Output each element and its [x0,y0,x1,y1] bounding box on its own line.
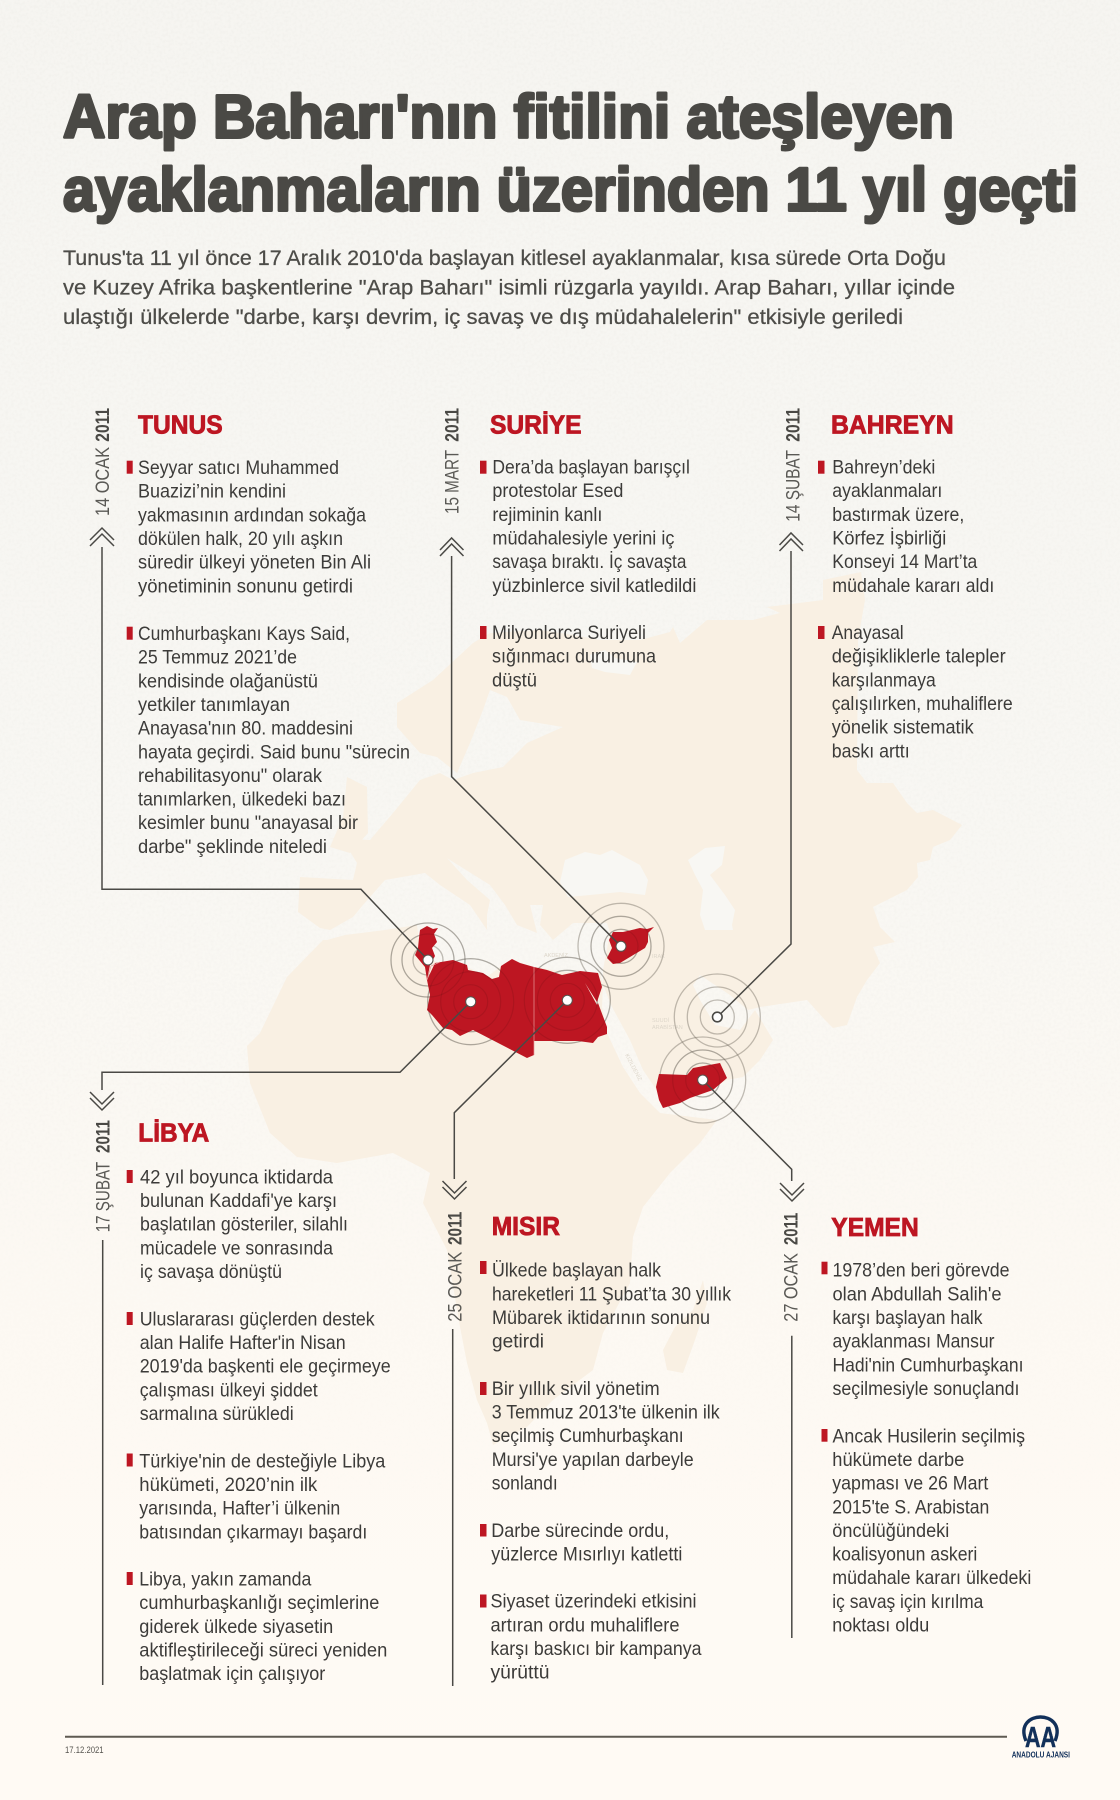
text block: Libya paragraph 4: cumhurbaşkanlığı seçimlerine [139,1592,379,1614]
intro text: ulaştığı ülkelerde "darbe, karşı devrim, iç savaş ve dış müdahalelerin" etkisiyle geriledi [63,306,903,329]
text block: Bahreyn paragraph 1: bastırmak üzere, [832,504,964,526]
text block: Yemen paragraph 2: 2015'te S. Arabistan [832,1496,989,1518]
title: ayaklanmaların üzerinden 11 yıl geçti [63,156,1078,224]
text block: Suriye paragraph 1: protestolar Esed [492,480,623,502]
rings: Bahrain [674,974,760,1060]
date: 14 Ocak 2011: 14 OCAK [92,447,114,516]
text block: Yemen paragraph 2: koalisyonun askeri [832,1544,977,1566]
text block: Suriye paragraph 1: yüzbinlerce sivil katledildi [492,575,696,597]
text block: Mısır paragraph 1: Mübarek iktidarının sonunu [492,1307,710,1329]
text block: Mısır paragraph 4: yürüttü [490,1662,550,1684]
land: Madagascar [663,1280,707,1373]
intro text: Tunus'ta 11 yıl önce 17 Aralık 2010'da başlayan kitlesel ayaklanmalar, kısa sürede Orta Doğu [63,247,946,270]
text block: Tunus paragraph 1: yönetiminin sonunu getirdi [138,575,353,597]
logo: Anadolu Ajansı [1012,1717,1070,1760]
map label: Suudi Arabistan: ARABİSTAN [652,1024,683,1031]
text block: Tunus paragraph 1: süredir ülkeyi yöneten Bin Ali [138,552,371,574]
text block: Mısır paragraph 4: artıran ordu muhaliflere [490,1614,680,1636]
date: 15 Mart 2011: 15 MART [441,450,463,514]
text block: Mısır paragraph 3: yüzlerce Mısırlıyı katletti [491,1544,682,1566]
text block: Libya paragraph 1: iç savaşa dönüştü [140,1261,282,1283]
text block: Libya paragraph 2: sarmalına sürükledi [140,1403,294,1425]
text block: Tunus paragraph 1: Seyyar satıcı Muhammed [138,457,339,479]
land: Africa [247,925,717,1445]
panel: Yemen [781,1213,1031,1638]
text block: Mısır paragraph 4: Siyaset üzerindeki etkisini [490,1591,696,1613]
highlighted countries [415,926,727,1108]
date: 14 Ocak 2011: 2011 [92,408,114,442]
timeline bar: Mısır [452,1329,454,1686]
text block: Suriye paragraph 2 [480,622,656,691]
text block: Yemen paragraph 2: öncülüğündeki [832,1520,949,1542]
panel: Bahreyn [783,408,1013,762]
text block: Libya paragraph 1: başlatılan gösteriler, silahlı [140,1214,348,1236]
arrow: Libya timeline leader [90,997,476,1110]
text block: Libya paragraph 1: bulunan Kaddafi'ye karşı [140,1190,337,1212]
panel: Libya [92,1120,391,1685]
timeline bar: Libya [102,1240,104,1685]
text block: Bahreyn paragraph 1: Körfez İşbirliği [832,526,946,550]
text block: Libya paragraph 4: Libya, yakın zamanda [139,1568,311,1590]
text block: Libya paragraph 2: alan Halife Hafter'in Nisan [140,1332,346,1354]
map label: Akdeniz: AKDENİZ [544,952,568,959]
text block: Libya paragraph 4: aktifleştirileceği süreci yeniden [139,1640,387,1662]
rings: Egypt [524,957,610,1043]
rings: Syria [578,903,664,989]
country: Tunisia [415,926,438,980]
footer date: 17.12.2021 [65,1745,104,1755]
date: 25 Ocak 2011: 2011 [445,1212,467,1245]
text block: Bahreyn paragraph 1: müdahale kararı aldı [832,575,994,597]
text block: Yemen paragraph 2: noktası oldu [832,1614,929,1636]
text block: Bahreyn paragraph 2: Anayasal [832,622,904,644]
text block: Tunus paragraph 2: rehabilitasyonu" olarak [138,765,322,787]
heading: Suriye: SURİYE [490,411,582,439]
map label: Suudi Arabistan: SUUDİ [652,1018,669,1024]
text block: Yemen paragraph 2: iç savaş için kırılma [832,1591,983,1613]
arrow: Yemen timeline leader [698,1075,804,1201]
text block: Bahreyn paragraph 1 [818,456,994,597]
logo: Anadolu Ajansı: ANADOLU AJANSI [1012,1751,1070,1760]
heading: Bahreyn: BAHREYN [831,411,954,439]
date: 15 Mart 2011: 2011 [441,408,463,442]
text block: Yemen paragraph 1: seçilmesiyle sonuçlandı [832,1378,1020,1400]
text block: Yemen paragraph 1: ayaklanması Mansur [832,1331,995,1353]
country: Yemen [656,1063,727,1108]
rings: Libya [428,959,514,1045]
text block: Tunus paragraph 2: Anayasa'nın 80. maddesini [138,718,353,740]
arrow: Suriye timeline leader [440,538,626,951]
text block: Yemen paragraph 2: yapması ve 26 Mart [832,1473,989,1495]
text block: Suriye paragraph 2: sığınmacı durumuna [492,646,656,668]
heading: Tunus: TUNUS [138,411,223,439]
text block: Libya paragraph 2: Uluslararası güçlerden destek [140,1308,375,1330]
text block: Yemen paragraph 1: Hadi'nin Cumhurbaşkanı [832,1354,1024,1376]
text block: Suriye paragraph 1: müdahalesiyle yerini iç [492,528,675,550]
country: Libya and Egypt [427,959,607,1058]
text block: Mısır paragraph 2: Bir yıllık sivil yönetim [492,1378,660,1400]
country: Syria [607,927,654,964]
text block: Libya paragraph 2 [127,1308,391,1425]
text block: Suriye paragraph 1: Dera’da başlayan barışçıl [492,456,690,478]
text block: Yemen paragraph 1: olan Abdullah Salih'e [832,1283,1002,1305]
text block: Tunus paragraph 2: hayata geçirdi. Said bunu "sürecin [138,741,410,763]
heading: Libya: LİBYA [138,1120,209,1148]
heading: Mısır: MISIR [492,1213,560,1241]
text block: Mısır paragraph 3: Darbe sürecinde ordu, [491,1520,669,1542]
text block: Yemen paragraph 1: 1978’den beri görevde [832,1260,1010,1282]
land: Eurasia [298,572,962,1107]
text block: Yemen paragraph 2 [822,1425,1031,1636]
intro text [63,247,955,329]
text block: Suriye paragraph 2: Milyonlarca Suriyeli [492,622,646,644]
text block: Tunus paragraph 2: Cumhurbaşkanı Kays Said, [138,623,350,645]
text block: Suriye paragraph 2: düştü [492,669,537,691]
text block: Mısır paragraph 4: karşı baskıcı bir kampanya [490,1638,702,1660]
text block: Tunus paragraph 1: yakmasının ardından sokağa [138,504,366,526]
sea: Caspian [688,846,735,930]
text block: Mısır paragraph 2 [480,1378,720,1494]
panel: Mısır [445,1212,731,1686]
text block: Tunus paragraph 2: darbe" şeklinde niteledi [138,836,327,858]
text block: Libya paragraph 2: çalışması ülkeyi şiddet [140,1379,318,1401]
rings: Yemen [660,1037,746,1123]
text block: Libya paragraph 4 [127,1568,387,1685]
text block: Libya paragraph 3: batısından çıkarmayı başardı [139,1521,367,1543]
date: 17 Şubat 2011: 2011 [92,1120,114,1153]
location rings [391,903,760,1123]
text block: Mısır paragraph 2: Mursi'ye yapılan darbeyle [492,1449,694,1471]
text block: Bahreyn paragraph 2: değişikliklerle talepler [832,646,1006,668]
text block: Yemen paragraph 2: Ancak Husilerin seçilmiş [832,1425,1025,1447]
text block: Tunus paragraph 1: Buazizi’nin kendini [138,481,286,503]
arrow: Tunus timeline leader [90,528,433,965]
text block: Libya paragraph 3: yarısında, Hafter’i ülkenin [139,1498,340,1520]
text block: Mısır paragraph 1 [480,1260,731,1353]
date: 14 Şubat 2011: 14 ŞUBAT [783,450,805,522]
arrow: Mısır timeline leader [442,995,572,1199]
title [63,82,1078,224]
date: 25 Ocak 2011: 25 OCAK [445,1252,467,1322]
map label: Kızıldeniz: KIZILDENİZ [623,1053,644,1083]
date: 27 Ocak 2011: 27 OCAK [781,1253,803,1322]
text block: Bahreyn paragraph 2: çalışılırken, muhaliflere [832,693,1013,715]
text block: Bahreyn paragraph 2: karşılanmaya [832,669,936,691]
text block: Libya paragraph 3: hükümeti, 2020’nin ilk [139,1474,318,1496]
heading: Yemen: YEMEN [831,1214,919,1242]
map label: Irak: IRAK [652,954,665,960]
text block: Mısır paragraph 3 [480,1520,682,1566]
text block: Libya paragraph 4: başlatmak için çalışıyor [139,1663,326,1685]
text block: Mısır paragraph 1: hareketleri 11 Şubat’ta 30 yıllık [492,1283,731,1305]
text block: Libya paragraph 1 [127,1166,348,1283]
text block: Tunus paragraph 1: dökülen halk, 20 yılı aşkın [138,528,343,550]
text block: Libya paragraph 4: giderek ülkede siyasetin [139,1616,333,1638]
panel: Suriye [441,408,696,691]
date: 14 Şubat 2011: 2011 [783,408,805,442]
text block: Yemen paragraph 1 [822,1260,1024,1400]
text block: Yemen paragraph 2: hükümete darbe [832,1449,964,1471]
text block: Libya paragraph 3 [127,1450,385,1543]
text block: Libya paragraph 1: 42 yıl boyunca iktidarda [140,1166,333,1188]
text block: Mısır paragraph 2: 3 Temmuz 2013'te ülkenin ilk [492,1402,720,1424]
text block: Tunus paragraph 2: tanımlarken, ülkedeki bazı [138,789,346,811]
text block: Mısır paragraph 2: seçilmiş Cumhurbaşkanı [492,1425,684,1447]
date: 27 Ocak 2011: 2011 [781,1213,803,1245]
timeline bar: Yemen [791,1336,793,1638]
land: Britain [330,777,368,853]
text block: Tunus paragraph 2: kendisinde olağanüstü [138,670,318,692]
text block: Libya paragraph 2: 2019'da başkenti ele geçirmeye [140,1356,391,1378]
footer rule [65,1736,1007,1738]
text block: Bahreyn paragraph 2: yönelik sistematik [832,717,974,739]
text block: Mısır paragraph 1: Ülkede başlayan halk [492,1260,661,1282]
text block: Tunus paragraph 2: kesimler bunu "anayasal bir [138,812,358,834]
panel: Tunus [92,408,410,858]
arrow: Bahreyn timeline leader [712,533,803,1022]
text block: Libya paragraph 3: Türkiye'nin de desteğiyle Libya [139,1450,385,1472]
text block: Yemen paragraph 2: müdahale kararı ülkedeki [832,1567,1031,1589]
logo: Anadolu Ajansı: AA [1025,1722,1056,1754]
text block: Yemen paragraph 1: karşı başlayan halk [832,1307,983,1329]
text block: Bahreyn paragraph 1: ayaklanmaları [832,480,942,502]
text block: Libya paragraph 1: mücadele ve sonrasında [140,1237,333,1259]
text block: Tunus paragraph 2 [127,623,410,858]
text block: Bahreyn paragraph 1: Konseyi 14 Mart’ta [832,551,977,573]
text block: Suriye paragraph 1: rejiminin kanlı [492,504,602,526]
intro text: ve Kuzey Afrika başkentlerine "Arap Baharı" isimli rüzgarla yayıldı. Arap Baharı, yıllar içinde [63,276,955,300]
sea: Black Sea [560,850,648,897]
text block: Tunus paragraph 2: 25 Temmuz 2021’de [138,647,297,669]
text block: Suriye paragraph 1: savaşa bıraktı. İç savaşta [492,550,687,573]
text block: Suriye paragraph 1 [480,456,696,597]
title: Arap Baharı'nın fitilini ateşleyen [63,82,954,150]
background paper [0,0,1120,595]
text block: Bahreyn paragraph 1: Bahreyn’deki [832,456,935,478]
date: 17 Şubat 2011: 17 ŞUBAT [92,1162,114,1232]
text block: Bahreyn paragraph 2 [818,622,1013,762]
map: Europe, Africa and Asia [247,572,962,1445]
sea: White Sea [590,650,637,675]
text block: Tunus paragraph 2: yetkiler tanımlayan [138,694,290,716]
text block: Mısır paragraph 1: getirdi [492,1331,544,1353]
faint ring overlay on countries [391,916,733,1110]
text block: Bahreyn paragraph 2: baskı arttı [832,740,910,762]
text block: Mısır paragraph 2: sonlandı [492,1472,558,1494]
text block: Mısır paragraph 4 [480,1591,702,1684]
text block: Tunus paragraph 1 [127,457,371,597]
rings: Tunisia [391,923,465,997]
